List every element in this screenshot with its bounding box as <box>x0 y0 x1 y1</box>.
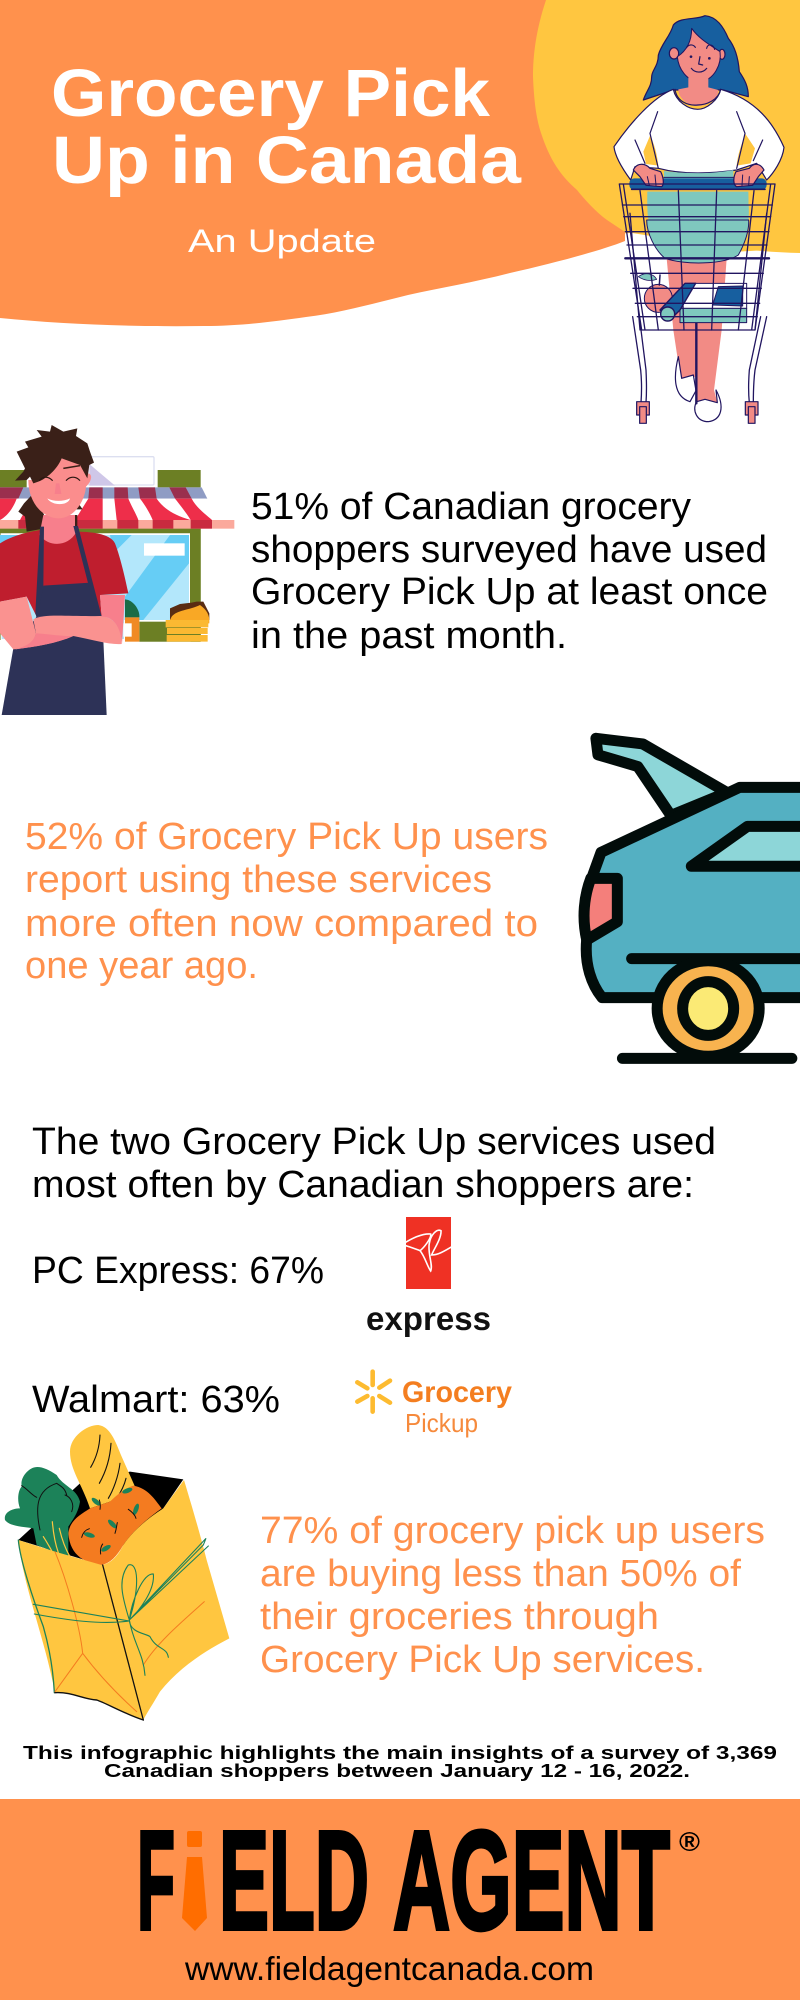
header background <box>0 0 800 326</box>
panel: footer <box>0 1799 800 2000</box>
text: PC Express share: PC Express: 67% <box>32 1250 324 1292</box>
text: 77 percent stat: Grocery Pick Up services. <box>260 1639 705 1681</box>
text: 51 percent stat: Grocery Pick Up at least once <box>251 571 768 613</box>
survey footnote: Canadian shoppers between January 12 - 16, 2022. <box>104 1761 690 1781</box>
logo: PC Express <box>366 1217 491 1337</box>
icon: shopkeeper in front of store <box>0 425 234 715</box>
logo: PC Express: express <box>366 1300 491 1337</box>
panel: top services <box>32 1121 716 1438</box>
text: 51 percent stat: 51% of Canadian grocery <box>251 486 691 528</box>
text: 51 percent stat <box>251 486 768 657</box>
text: 77 percent stat: are buying less than 50% of <box>260 1553 741 1595</box>
panel: share of groceries stat <box>5 1425 765 1720</box>
text: 77 percent stat <box>260 1510 765 1681</box>
survey footnote <box>23 1743 777 1781</box>
text: 52 percent stat: report using these services <box>25 859 492 901</box>
text: Walmart share: Walmart: 63% <box>32 1379 280 1421</box>
text: 52 percent stat: one year ago. <box>25 945 258 987</box>
logo: Walmart Grocery Pickup <box>357 1372 512 1438</box>
subtitle: An Update <box>188 223 376 259</box>
title: Grocery Pick <box>51 56 491 131</box>
logo: Walmart Grocery Pickup: Pickup <box>405 1408 478 1438</box>
icon: woman pushing shopping cart <box>614 16 784 423</box>
text: services heading: most often by Canadian shoppers are: <box>32 1164 694 1206</box>
text: 52 percent stat: 52% of Grocery Pick Up users <box>25 816 548 858</box>
logo: Field Agent <box>137 1801 700 1959</box>
survey footnote: This infographic highlights the main insights of a survey of 3,369 <box>23 1743 777 1763</box>
logo: Field Agent: ELD <box>219 1801 369 1959</box>
text: 77 percent stat: their groceries through <box>260 1596 659 1638</box>
title: Up in Canada <box>52 123 522 198</box>
icon: paper grocery bag <box>5 1425 229 1720</box>
icon: car with open trunk <box>584 738 800 1058</box>
text: services heading: The two Grocery Pick Up services used <box>32 1121 716 1163</box>
title <box>51 56 522 198</box>
text: 52 percent stat <box>25 816 548 987</box>
panel: shopper stat <box>0 425 768 715</box>
logo: Walmart Grocery Pickup: Grocery <box>402 1376 512 1409</box>
text: 52 percent stat: more often now compared to <box>25 903 538 945</box>
text: 51 percent stat: in the past month. <box>251 615 567 657</box>
website url: www.fieldagentcanada.com <box>184 1950 594 1987</box>
text: services heading <box>32 1121 716 1206</box>
logo: Field Agent: F <box>137 1801 175 1959</box>
logo: Field Agent: ® <box>679 1827 700 1857</box>
text: 77 percent stat: 77% of grocery pick up users <box>260 1510 765 1552</box>
text: 51 percent stat: shoppers surveyed have used <box>251 529 767 571</box>
panel: usage frequency stat <box>25 738 800 1058</box>
